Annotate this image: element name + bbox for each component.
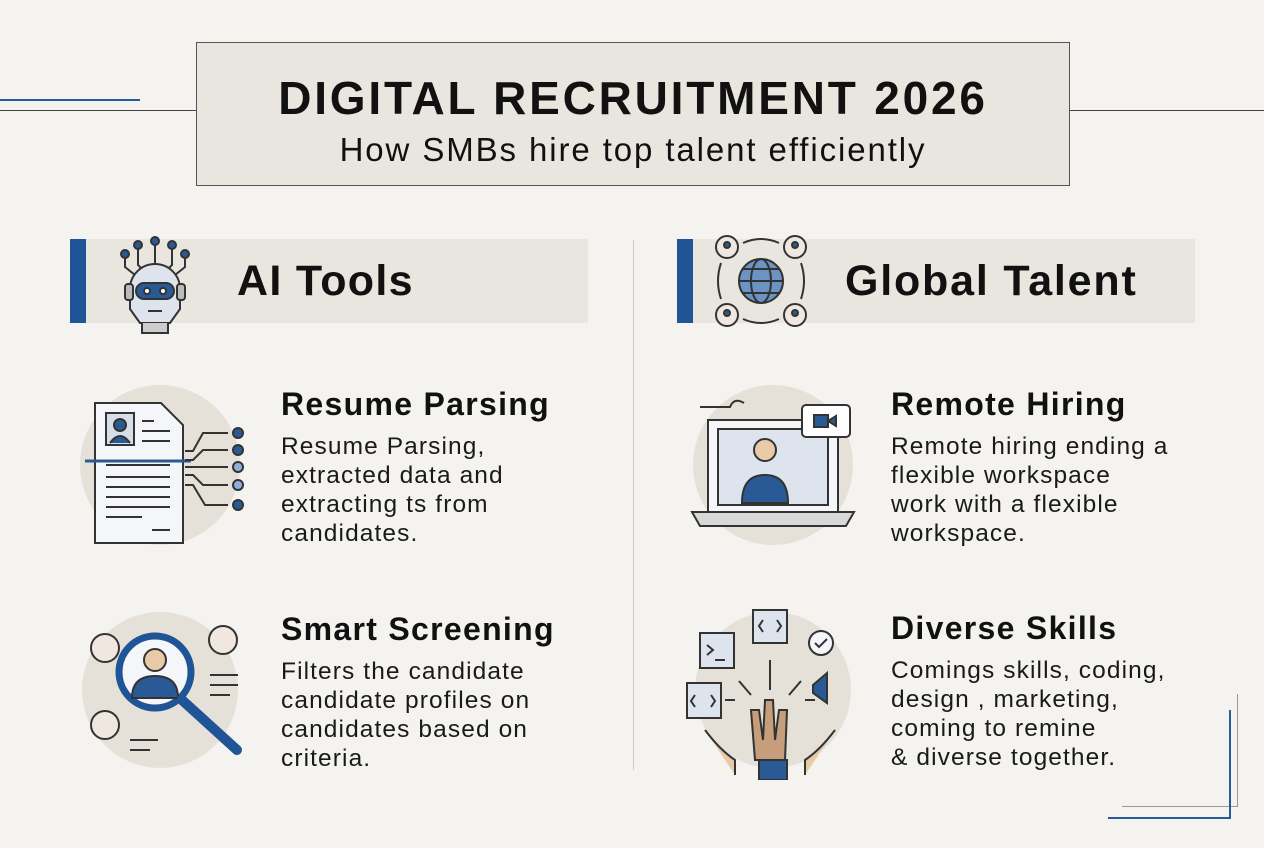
item: Smart Screening: candidate profiles on [281,687,530,714]
icon: globe network [715,235,807,327]
item: Remote Hiring: flexible workspace [891,462,1111,489]
icon: robot [120,236,190,334]
item: Remote Hiring: work with a flexible [891,491,1119,518]
item: Remote Hiring [690,385,1169,547]
item: Remote Hiring: workspace. [891,520,1026,547]
item: Resume Parsing: extracted data and [281,462,504,489]
icon: laptop video call [690,385,856,545]
item: Diverse Skills: & diverse together. [891,744,1116,771]
item: Smart Screening: criteria. [281,745,371,772]
header: AI Tools [70,239,588,323]
item: Smart Screening: Filters the candidate [281,658,525,685]
item: Diverse Skills: design , marketing, [891,686,1119,713]
item: Diverse Skills: coming to remine [891,715,1097,742]
title box [196,42,1070,186]
header: Global Talent: Global Talent [845,257,1138,305]
icon: magnifier [82,612,242,768]
item: Diverse Skills: Diverse Skills [891,610,1117,646]
item: Resume Parsing: candidates. [281,520,418,547]
item: Smart Screening: candidates based on [281,716,528,743]
subtitle: How SMBs hire top talent efficiently [340,131,926,168]
item: Diverse Skills [686,609,1165,780]
item: Resume Parsing: extracting ts from [281,491,489,518]
header: Global Talent [677,239,1195,323]
item: Resume Parsing: Resume Parsing, [281,433,485,460]
item: Remote Hiring: Remote Hiring [891,386,1127,422]
item: Smart Screening [82,611,555,772]
title: DIGITAL RECRUITMENT 2026 [278,72,988,124]
item: Resume Parsing: Resume Parsing [281,386,550,422]
header text: AI Tools [237,257,414,305]
item: Remote Hiring: Remote hiring ending a [891,433,1169,460]
icon: resume [80,385,244,545]
item: Resume Parsing [80,385,550,547]
item: Smart Screening: Smart Screening [281,611,555,647]
icon: hands and skills [686,609,851,780]
item: Diverse Skills: Comings skills, coding, [891,657,1165,684]
